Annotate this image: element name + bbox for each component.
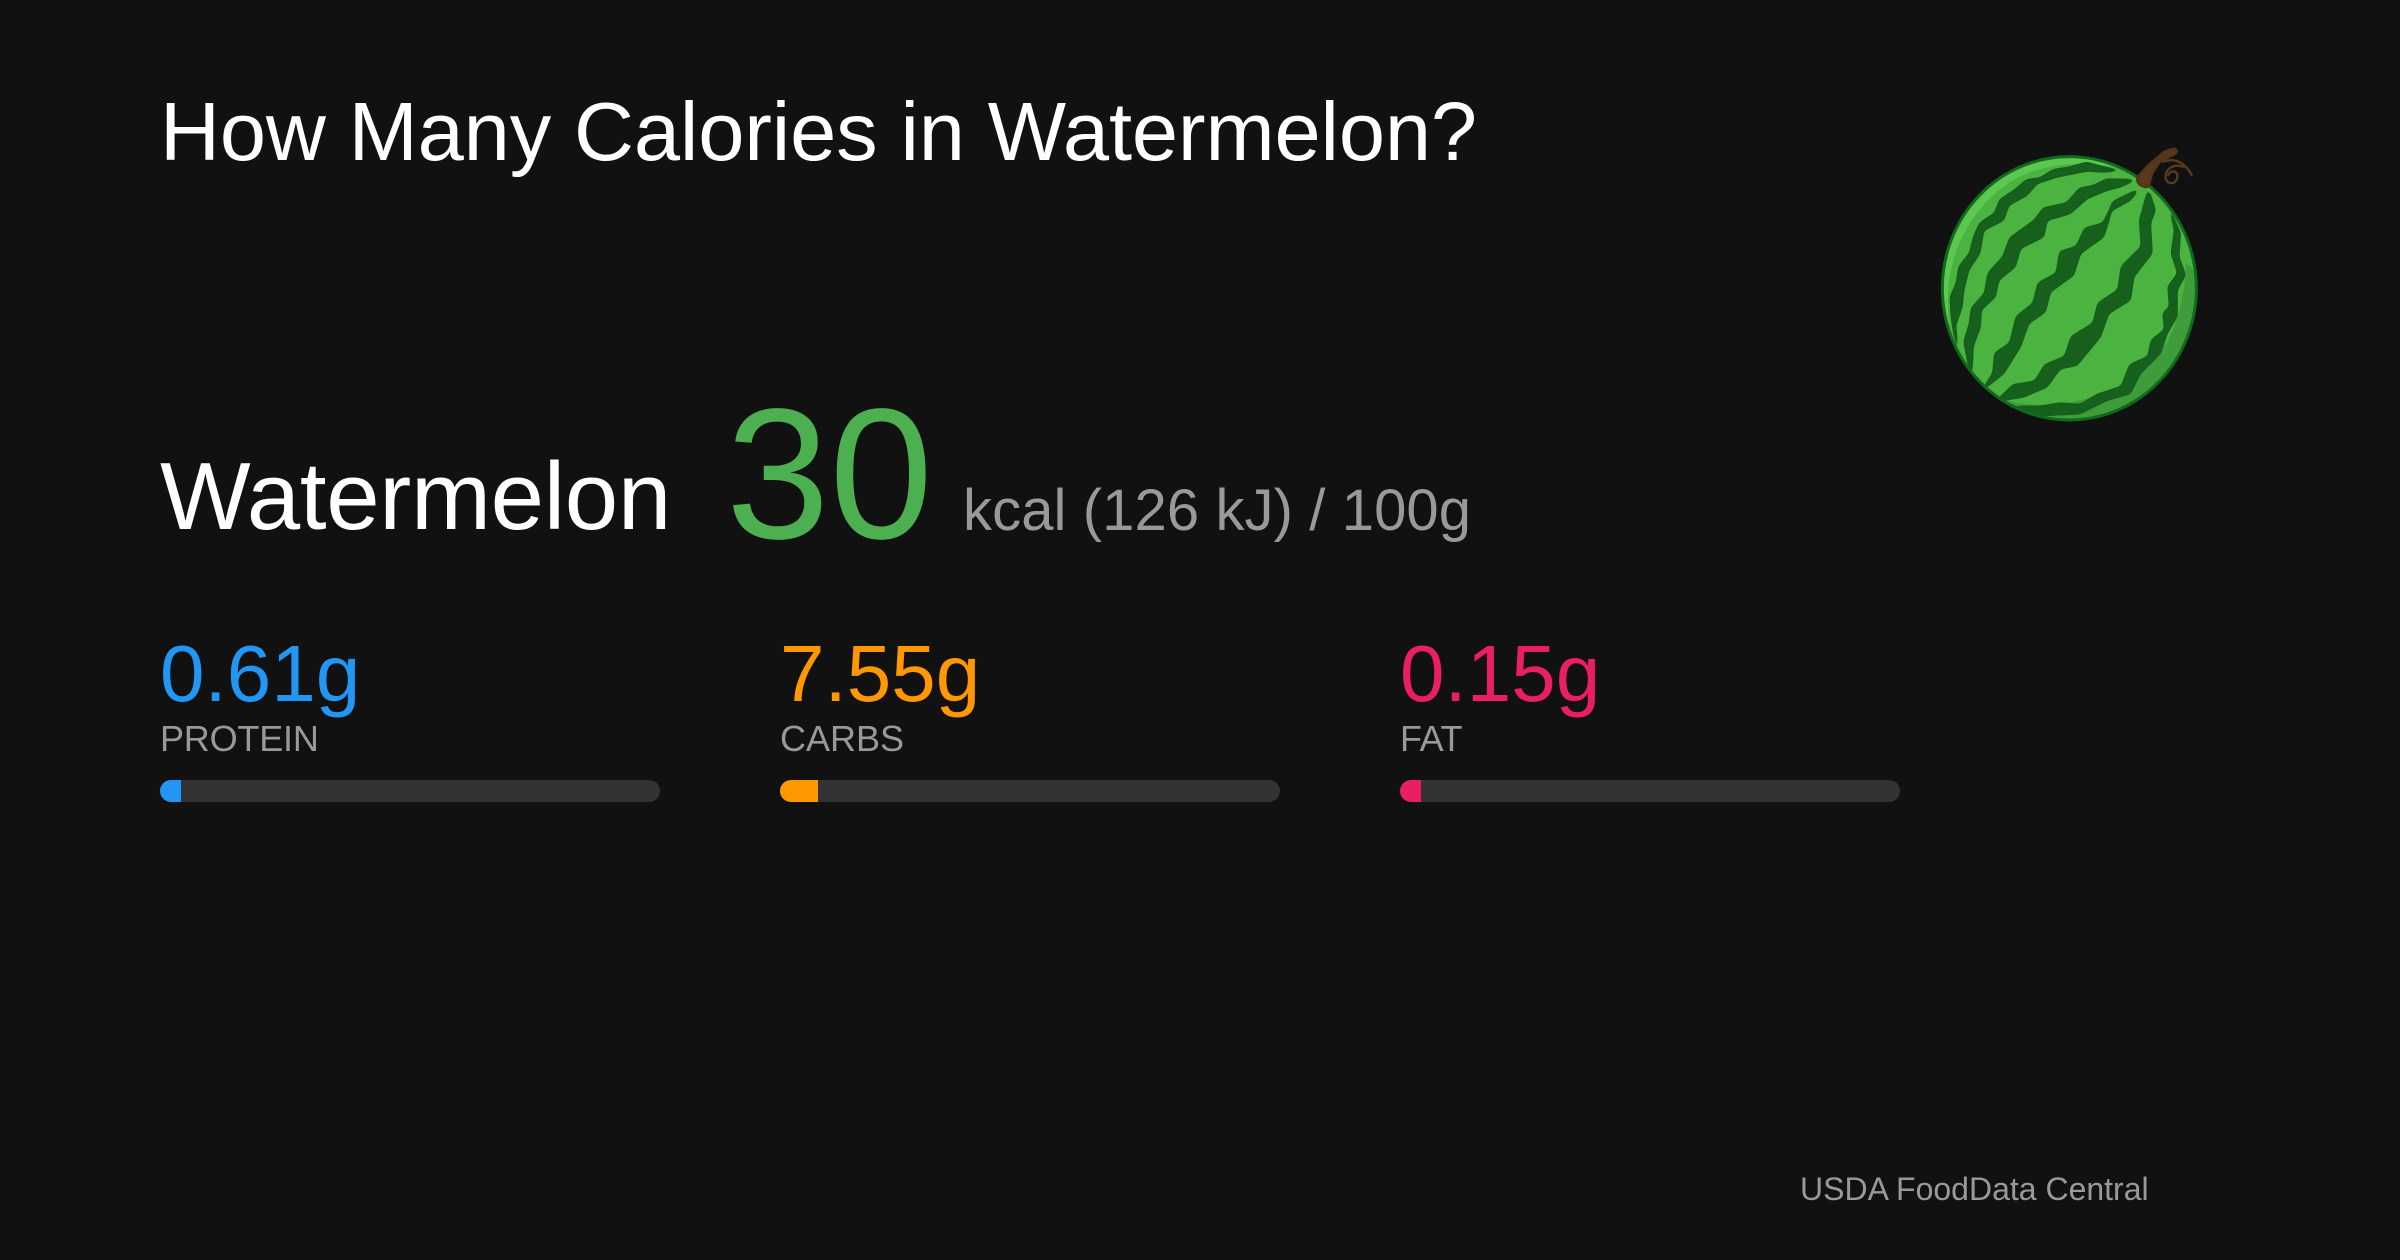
carbs bar [780,780,1280,802]
fat value: 0.15g [1400,629,1600,718]
carbs label: CARBS [780,718,904,759]
protein bar [160,780,660,802]
protein label: PROTEIN [160,718,319,759]
food name: Watermelon [160,443,671,550]
panel: fat [1400,629,1900,802]
icon: watermelon [1940,148,2198,422]
protein value: 0.61g [160,629,360,718]
carbs value: 7.55g [780,629,980,718]
title: How Many Calories in Watermelon? [160,85,1477,178]
calorie unit: kcal (126 kJ) / 100g [963,478,1471,543]
panel: protein [160,629,660,802]
fat label: FAT [1400,718,1462,759]
calorie value: 30 [726,371,933,578]
source: USDA FoodData Central [1800,1171,2149,1207]
panel: carbs [780,629,1280,802]
fat bar [1400,780,1900,802]
